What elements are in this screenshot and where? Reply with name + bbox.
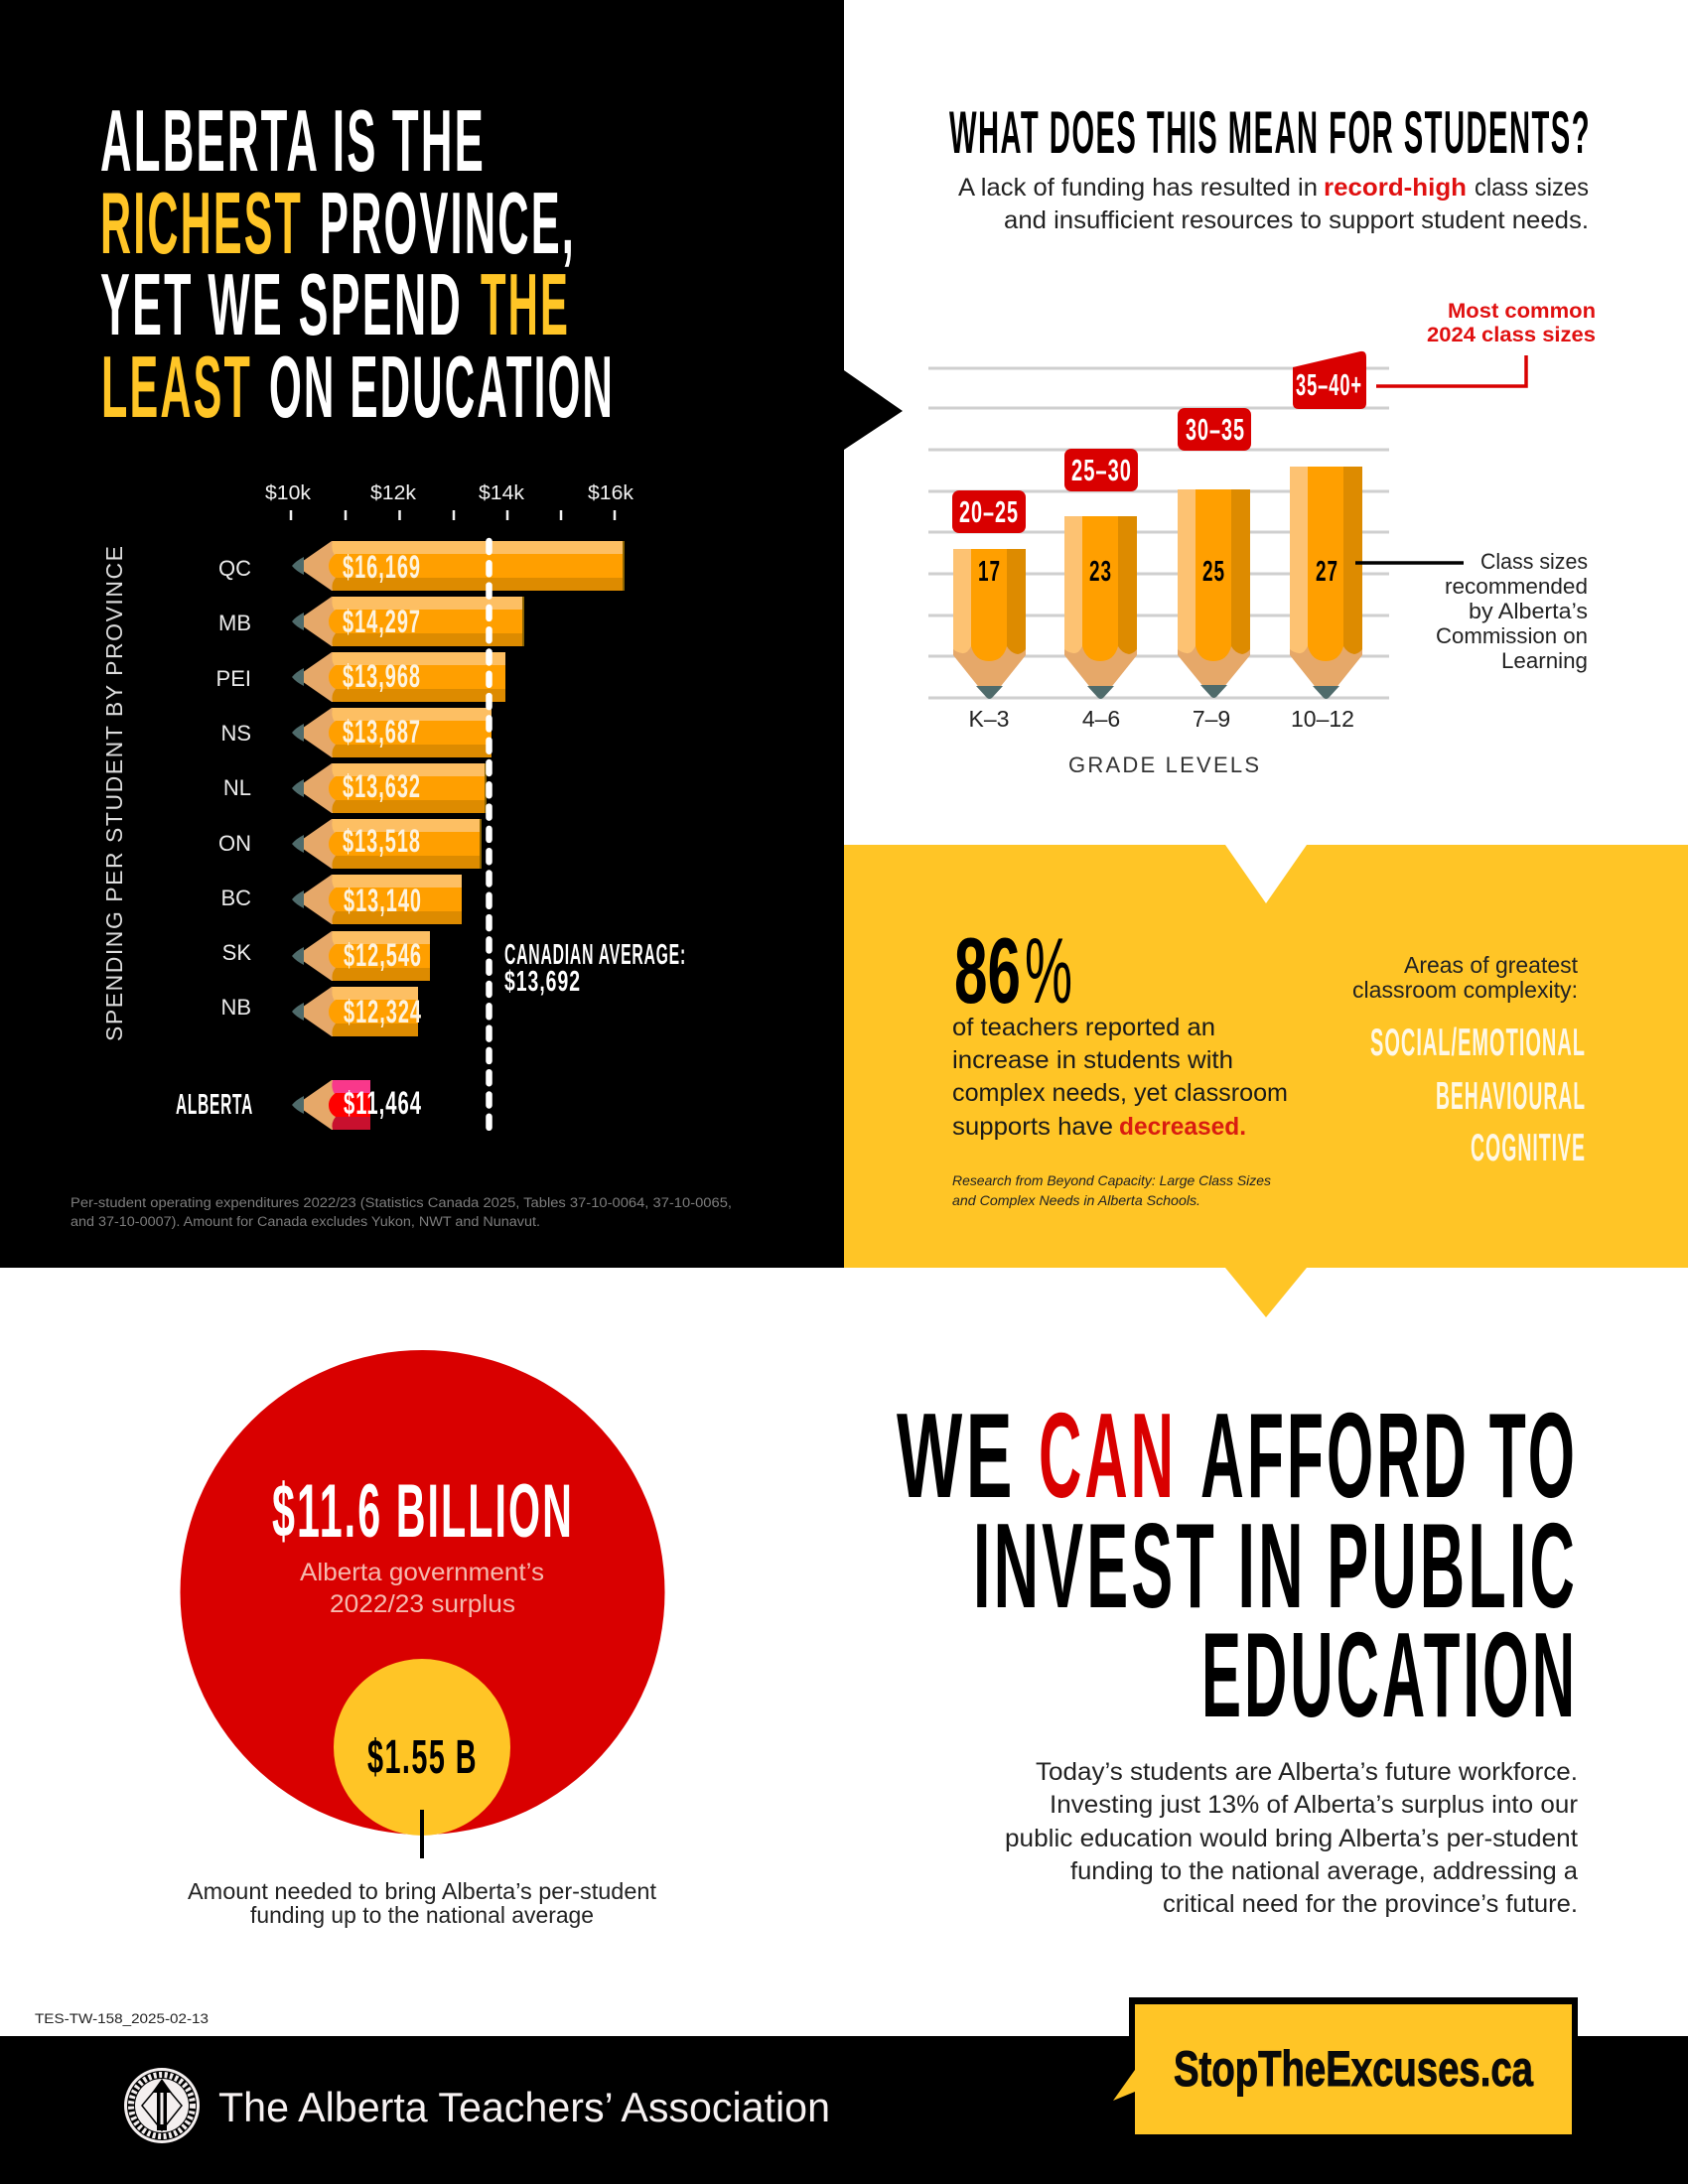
pencil bar: MB — [292, 597, 524, 646]
bar values: $11,464 — [344, 1085, 422, 1121]
callout: most common class sizes: Most common — [1448, 300, 1596, 323]
needed amount circle — [334, 1659, 510, 1836]
province labels: PEI — [216, 666, 251, 691]
headline: we can afford: WE — [897, 1388, 1016, 1523]
pencil bar: SK — [292, 931, 430, 981]
complexity areas — [1370, 1022, 1586, 1169]
recommended sizes: 17 — [978, 556, 1001, 588]
bar chart: spending per student by province — [101, 482, 686, 1138]
leader line — [420, 1810, 424, 1858]
title: LEAST — [101, 338, 252, 436]
intro text: and insufficient resources to support student needs. — [1004, 206, 1589, 234]
axis ticks: $14k — [479, 482, 525, 504]
bar values: $12,546 — [344, 937, 422, 973]
body text: future workforce: funding to the national average, addressing a — [1070, 1857, 1578, 1885]
needed amount label — [188, 1878, 657, 1928]
statistic text: of teachers reported an — [952, 1014, 1215, 1041]
recommended sizes: 23 — [1089, 556, 1112, 588]
canadian average label — [504, 939, 686, 998]
bar values: $16,169 — [343, 549, 421, 585]
axis ticks — [265, 482, 634, 520]
axis ticks: $10k — [265, 482, 312, 504]
badge: 25-30: 25–30 — [1071, 453, 1132, 487]
province labels: BC — [220, 886, 251, 910]
province labels: NL — [223, 775, 251, 800]
badge: 35-40+ — [1293, 351, 1366, 409]
headline: we can afford: CAN — [1039, 1388, 1177, 1523]
bar values: $13,632 — [343, 768, 421, 804]
badge: 30-35: 30–35 — [1186, 412, 1245, 447]
bar values: $13,687 — [343, 714, 421, 750]
bar values: $12,324 — [344, 994, 422, 1029]
alberta label: ALBERTA — [176, 1089, 253, 1121]
recommended sizes: 27 — [1316, 556, 1338, 588]
pencil bar: NS — [292, 708, 492, 757]
footnote — [70, 1195, 732, 1229]
surplus amount: $11.6 BILLION — [272, 1469, 574, 1554]
callout: recommended class sizes — [1355, 549, 1588, 673]
province labels: NS — [220, 721, 251, 746]
badge: 20-25: 20–25 — [959, 494, 1019, 529]
class size chart — [928, 300, 1596, 777]
bar values: $13,140 — [344, 883, 422, 918]
axis ticks: $12k — [370, 482, 417, 504]
panel: what does this mean for students — [928, 99, 1596, 777]
callout: most common class sizes — [1376, 300, 1596, 386]
research citation: and Complex Needs in Alberta Schools. — [952, 1192, 1200, 1208]
province labels: QC — [218, 556, 251, 581]
canadian average dashed line — [486, 541, 492, 1138]
intro text: A lack of funding has resulted in — [958, 174, 1318, 202]
statistic text: increase in students with — [952, 1046, 1233, 1074]
needed amount: $1.55 B — [367, 1731, 478, 1784]
pencil: 4-6 — [1064, 516, 1137, 699]
bar values: $13,968 — [343, 658, 421, 694]
badge: 20-25 — [952, 490, 1026, 533]
title — [100, 91, 615, 436]
province labels: NB — [220, 995, 251, 1020]
recommended sizes — [978, 556, 1338, 588]
grade labels: 4–6 — [1082, 706, 1120, 732]
body text: future workforce — [1005, 1758, 1578, 1918]
intro text: record-high — [1324, 174, 1467, 202]
complexity intro: Areas of greatest — [1404, 952, 1579, 978]
statistic text: decreased. — [1119, 1113, 1246, 1141]
province labels: ON — [218, 831, 251, 856]
intro text: class sizes — [1475, 174, 1589, 202]
callout: recommended class sizes: Commission on — [1436, 623, 1588, 648]
footnote: Per-student operating expenditures 2022/23 (Statistics Canada 2025, Tables 37-10-0064, 37-10-0065, — [70, 1195, 732, 1210]
pencil bar: NB — [292, 987, 418, 1036]
pencil bar: Alberta — [292, 1080, 370, 1130]
province labels — [216, 556, 251, 1020]
needed amount label: Amount needed to bring Alberta’s per-student — [188, 1878, 657, 1904]
research citation: Research from Beyond Capacity: Large Class Sizes — [952, 1172, 1271, 1188]
grade labels: 10–12 — [1291, 706, 1354, 732]
title: THE — [481, 255, 570, 353]
pencil bar: PEI — [292, 652, 505, 702]
badge: 35-40+: 35–40+ — [1296, 367, 1362, 402]
document code: TES-TW-158_2025-02-13 — [35, 2011, 209, 2026]
research citation — [952, 1172, 1271, 1208]
statistic text — [952, 1014, 1288, 1141]
surplus label: 2022/23 surplus — [330, 1590, 515, 1618]
grade labels: 7–9 — [1193, 706, 1230, 732]
pencil: 7-9 — [1178, 489, 1250, 698]
pencil bar: NL — [292, 763, 487, 813]
pencil bar: QC — [292, 541, 625, 591]
panel: richest province — [0, 0, 903, 1268]
pencil bar: BC — [292, 875, 462, 924]
icon: association crest — [124, 2068, 200, 2143]
recommended sizes: 25 — [1202, 556, 1225, 588]
website: StopTheExcuses.ca — [1174, 2041, 1534, 2097]
needed amount label: funding up to the national average — [250, 1902, 594, 1928]
callout: most common class sizes: 2024 class sizes — [1427, 324, 1596, 346]
province labels: MB — [218, 611, 251, 635]
complexity intro — [1352, 952, 1579, 1003]
grade labels: K–3 — [969, 706, 1009, 732]
panel: richest province: ON EDUCATION — [269, 338, 615, 436]
body text: future workforce: critical need for the province’s future. — [1163, 1890, 1578, 1918]
statistic: 86 — [954, 918, 1021, 1023]
footnote: and 37-10-0007). Amount for Canada excludes Yukon, NWT and Nunavut. — [70, 1214, 540, 1229]
statistic: % — [1025, 918, 1072, 1023]
badge: 25-30 — [1064, 449, 1138, 491]
association name: The Alberta Teachers’ Association — [218, 2084, 830, 2130]
panel: 86 percent of teachers — [844, 845, 1688, 1317]
body text: future workforce: Investing just 13% of Alberta’s surplus into our — [1050, 1791, 1578, 1819]
callout: recommended class sizes: Learning — [1501, 648, 1588, 673]
pencil: 10-12 — [1290, 467, 1362, 699]
intro text — [958, 174, 1589, 234]
pencil: K-3 — [953, 549, 1026, 699]
footer band — [0, 1997, 1688, 2184]
statistic text: complex needs, yet classroom — [952, 1079, 1288, 1107]
title: PROVINCE, — [320, 174, 576, 272]
bar values — [343, 549, 422, 1121]
headline: we can afford — [897, 1388, 1578, 1742]
title: RICHEST — [100, 174, 303, 272]
circle chart: surplus — [181, 1350, 665, 1928]
callout: recommended class sizes: recommended — [1445, 574, 1588, 599]
surplus label — [300, 1559, 544, 1618]
bar values: $13,518 — [343, 823, 421, 859]
badge: 30-35 — [1178, 408, 1251, 451]
body text: future workforce: public education would bring Alberta’s per-student — [1005, 1825, 1578, 1852]
pencil bar: ON — [292, 819, 482, 869]
title: ALBERTA IS THE — [100, 91, 486, 190]
bar values: $14,297 — [343, 604, 421, 639]
grade labels — [969, 706, 1354, 732]
axis title: GRADE LEVELS — [1068, 752, 1259, 777]
statistic text: supports have — [952, 1113, 1113, 1141]
callout: recommended class sizes: by Alberta’s — [1469, 599, 1588, 623]
call to action box — [1113, 1997, 1578, 2140]
province labels: SK — [222, 940, 251, 965]
axis ticks: $16k — [588, 482, 634, 504]
body text: future workforce: Today’s students are Alberta’s future workforce. — [1036, 1758, 1578, 1786]
complexity intro: classroom complexity: — [1352, 977, 1578, 1003]
canadian average label: CANADIAN AVERAGE: — [504, 939, 686, 971]
axis label: SPENDING PER STUDENT BY PROVINCE — [101, 546, 127, 1041]
title: YET WE SPEND — [100, 255, 463, 353]
canadian average label: $13,692 — [504, 966, 581, 998]
callout: recommended class sizes: Class sizes — [1480, 549, 1588, 574]
surplus label: Alberta government’s — [300, 1559, 544, 1586]
